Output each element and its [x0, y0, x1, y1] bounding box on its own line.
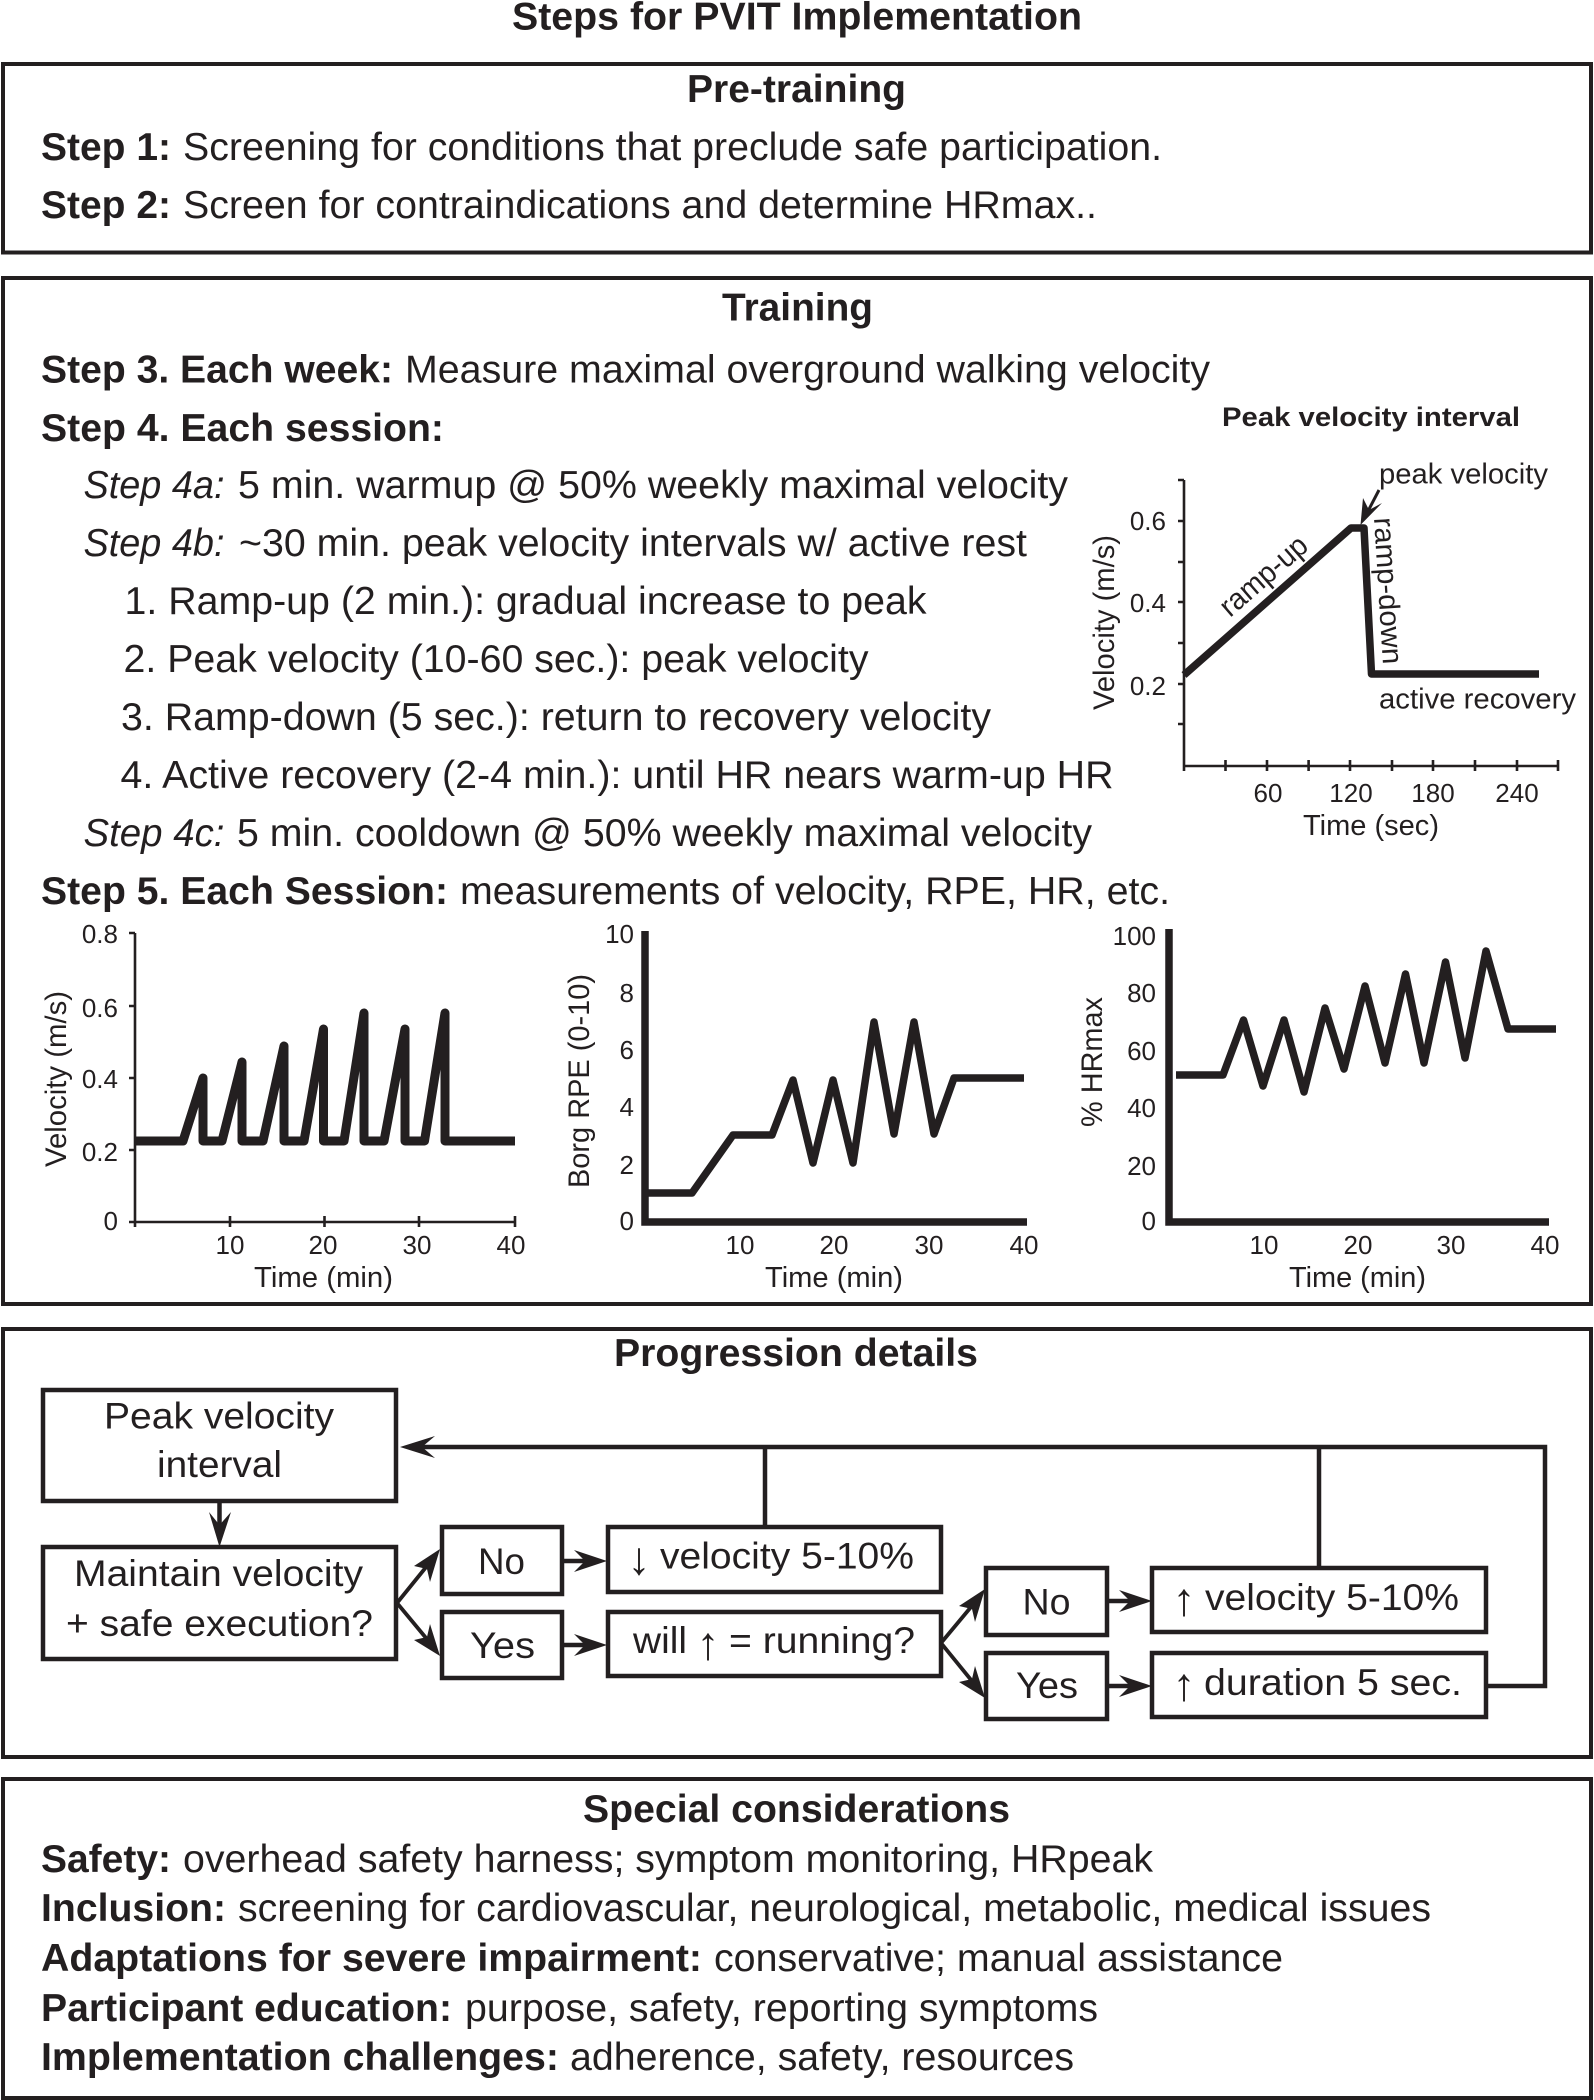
velocity line	[135, 1013, 515, 1141]
x tick labels: 120	[1329, 778, 1373, 808]
x tick labels: 240	[1495, 778, 1539, 808]
box: No: No	[478, 1541, 525, 1582]
arrow: feedback into peak velocity interval	[400, 1436, 435, 1458]
y tick labels: 0.6	[82, 993, 118, 1023]
text: step 4c: 5 min. cooldown @ 50% weekly maximal velocity	[237, 812, 1093, 855]
RPE line	[645, 1022, 1024, 1193]
x tick labels: 10	[1250, 1230, 1278, 1260]
text: step 4b: Step 4b:	[84, 522, 224, 565]
panel: progression details	[3, 1329, 1591, 1757]
text: ramp-down item: 3. Ramp-down (5 sec.): return to recovery velocity	[121, 696, 992, 739]
text: step 4a: 5 min. warmup @ 50% weekly maximal velocity	[238, 464, 1069, 507]
x tick labels: 40	[497, 1230, 525, 1260]
x axis label: Time (min)	[254, 1262, 393, 1294]
y tick labels: 0.4	[1130, 588, 1166, 618]
x axis label: Time (min)	[765, 1262, 903, 1294]
label: ramp-down: ramp-down	[1367, 516, 1408, 665]
arrows: maintain branch	[397, 1549, 440, 1656]
box: will increase equal running	[608, 1612, 941, 1676]
y tick labels	[605, 919, 634, 1236]
box: peak velocity interval: Peak velocity	[104, 1396, 335, 1436]
box: Yes: Yes	[470, 1625, 535, 1666]
y tick labels: 0	[104, 1206, 118, 1236]
y tick labels: 8	[620, 978, 634, 1008]
text: implementation challenges	[41, 2036, 1074, 2079]
x tick labels: 30	[915, 1230, 943, 1260]
x tick labels: 10	[726, 1230, 754, 1260]
box: will increase equal running: will	[632, 1620, 687, 1661]
text: adaptations: conservative; manual assistance	[714, 1937, 1283, 1980]
x tick labels: 30	[1437, 1230, 1465, 1260]
y tick labels: 40	[1127, 1093, 1156, 1123]
y tick labels: 60	[1127, 1036, 1156, 1066]
box: increase velocity: velocity 5-10%	[1205, 1577, 1459, 1618]
box: maintain velocity	[43, 1547, 396, 1659]
y tick labels: 6	[620, 1035, 634, 1065]
label: peak velocity: peak velocity	[1379, 458, 1548, 490]
box: decrease velocity: velocity 5-10%	[660, 1536, 914, 1576]
chart title: Peak velocity interval	[1222, 402, 1520, 432]
y tick labels	[1113, 921, 1156, 1236]
arrow: peak velocity pointer	[1360, 490, 1382, 525]
text: participant education: Participant education:	[41, 1987, 452, 2030]
text: step 4c: Step 4c:	[84, 812, 224, 855]
text: step 4a: Step 4a:	[84, 464, 224, 507]
text: implementation challenges: adherence, safety, resources	[570, 2036, 1074, 2079]
box: No second: No	[1022, 1582, 1070, 1622]
y axis label: Velocity (m/s)	[40, 991, 73, 1167]
text: participant education	[41, 1987, 1098, 2030]
y tick labels: 10	[605, 919, 634, 949]
text: peak velocity item: 2. Peak velocity (10-60 sec.): peak velocity	[124, 638, 869, 681]
box: increase duration	[1152, 1653, 1486, 1717]
x tick labels: 20	[1344, 1230, 1372, 1260]
x axis label: Time (sec)	[1303, 810, 1439, 842]
x tick labels: 180	[1411, 778, 1455, 808]
y tick labels: 20	[1127, 1151, 1156, 1181]
axes	[129, 933, 515, 1227]
text: participant education: purpose, safety, reporting symptoms	[465, 1987, 1098, 2030]
y tick labels: 80	[1127, 978, 1156, 1008]
chart: percent HRmax	[1076, 921, 1559, 1294]
x axis label: Time (min)	[1289, 1262, 1426, 1294]
box: increase velocity	[1152, 1568, 1486, 1632]
chart: peak velocity interval	[1088, 402, 1577, 842]
text: step 5: Step 5. Each Session:	[41, 870, 448, 913]
y tick labels: 0	[620, 1206, 634, 1236]
x tick labels	[726, 1230, 1038, 1260]
x tick labels	[1250, 1230, 1559, 1260]
text: ramp-up item: 1. Ramp-up (2 min.): gradual increase to peak	[124, 580, 927, 623]
text: step 1: Step 1:	[41, 126, 171, 169]
box: Yes second	[986, 1653, 1107, 1719]
panel: training	[3, 278, 1591, 1304]
y tick labels: 0.6	[1130, 506, 1166, 536]
text: step 5: measurements of velocity, RPE, HR, etc.	[460, 870, 1170, 913]
text: safety: Safety:	[41, 1838, 171, 1881]
box: peak velocity interval: interval	[157, 1444, 282, 1485]
box: increase duration: ↑	[1172, 1658, 1196, 1710]
x tick labels: 40	[1531, 1230, 1559, 1260]
box: maintain velocity: Maintain velocity	[74, 1553, 364, 1594]
box: decrease velocity	[608, 1527, 941, 1592]
box: maintain velocity: + safe execution?	[66, 1603, 373, 1644]
text: step 4b: ~30 min. peak velocity intervals w/ active rest	[239, 522, 1027, 565]
chart: Borg RPE	[563, 919, 1038, 1294]
text: step 1: Screening for conditions that preclude safe participation.	[183, 126, 1162, 169]
box: Yes	[442, 1612, 562, 1678]
heading: pre-training: Pre-training	[687, 68, 906, 111]
arrow: No to decrease velocity	[562, 1550, 607, 1572]
x tick labels	[1254, 778, 1539, 808]
text: inclusion: screening for cardiovascular, neurological, metabolic, medical issues	[238, 1887, 1431, 1930]
text: implementation challenges: Implementation challenges:	[41, 2036, 559, 2079]
velocity line	[1184, 528, 1539, 675]
label: ramp-up: ramp-up	[1213, 529, 1315, 623]
chart: velocity over session	[40, 919, 525, 1294]
arrow: Yes to running check	[562, 1634, 607, 1656]
text: step 4: Step 4. Each session:	[41, 407, 444, 450]
y tick labels	[1130, 506, 1166, 701]
y tick labels: 100	[1113, 921, 1156, 951]
axes	[1169, 929, 1549, 1222]
x tick labels: 20	[309, 1230, 337, 1260]
arrow: interval to maintain	[209, 1501, 231, 1547]
label: active recovery: active recovery	[1379, 684, 1577, 716]
arrow: No to increase velocity	[1107, 1590, 1152, 1612]
y tick labels: 0.2	[1130, 671, 1166, 701]
y tick labels	[82, 919, 118, 1236]
box: increase velocity: ↑	[1172, 1573, 1196, 1625]
arrow: Yes to increase duration	[1107, 1675, 1152, 1697]
box: peak velocity interval	[43, 1390, 396, 1501]
y axis label: Velocity (m/s)	[1088, 535, 1121, 710]
x tick labels: 40	[1010, 1230, 1038, 1260]
y tick labels: 0.2	[82, 1137, 118, 1167]
box: No second	[986, 1568, 1107, 1635]
text: step 3: Step 3. Each week:	[41, 348, 393, 392]
connector: feedback loop lines	[418, 1447, 1545, 1686]
text: safety: overhead safety harness; symptom monitoring, HRpeak	[183, 1838, 1154, 1881]
y tick labels: 0.4	[82, 1064, 118, 1094]
box: decrease velocity: ↓	[628, 1532, 650, 1584]
y tick labels: 4	[620, 1092, 634, 1122]
text: inclusion: Inclusion:	[41, 1887, 226, 1930]
y tick labels: 0.8	[82, 919, 118, 949]
text: step 2: Step 2:	[41, 184, 171, 227]
axes	[645, 931, 1027, 1222]
x tick labels: 10	[216, 1230, 244, 1260]
text: active recovery item: 4. Active recovery (2-4 min.): until HR nears warm-up HR	[120, 754, 1114, 797]
HR line	[1176, 951, 1556, 1092]
heading: progression details: Progression details	[614, 1332, 978, 1375]
panel: special considerations	[3, 1779, 1591, 2098]
y axis label: Borg RPE (0-10)	[563, 974, 596, 1188]
box: Yes second: Yes	[1016, 1665, 1078, 1706]
box: increase duration: duration 5 sec.	[1204, 1662, 1462, 1703]
heading: special considerations: Special considerations	[583, 1788, 1010, 1831]
x tick labels: 30	[403, 1230, 431, 1260]
text: step 2: Screen for contraindications and determine HRmax..	[183, 184, 1097, 227]
axes	[1178, 480, 1558, 771]
box: will increase equal running: ↑	[696, 1617, 720, 1669]
box: will increase equal running: = running?	[729, 1620, 915, 1661]
x tick labels: 20	[820, 1230, 848, 1260]
arrows: running check branch	[941, 1589, 985, 1698]
text: step 3	[41, 348, 1211, 392]
text: adaptations	[41, 1937, 1283, 1980]
panel: pre-training	[3, 64, 1591, 252]
text: adaptations: Adaptations for severe impairment:	[41, 1937, 702, 1980]
y tick labels: 2	[620, 1150, 634, 1180]
box: No	[442, 1527, 562, 1594]
x tick labels: 60	[1254, 778, 1282, 808]
y axis label: % HRmax	[1076, 997, 1109, 1127]
heading: training: Training	[722, 286, 873, 330]
x tick labels	[216, 1230, 525, 1260]
text: step 5	[41, 870, 1170, 913]
text: step 3: Measure maximal overground walking velocity	[405, 348, 1211, 392]
y tick labels: 0	[1142, 1206, 1156, 1236]
